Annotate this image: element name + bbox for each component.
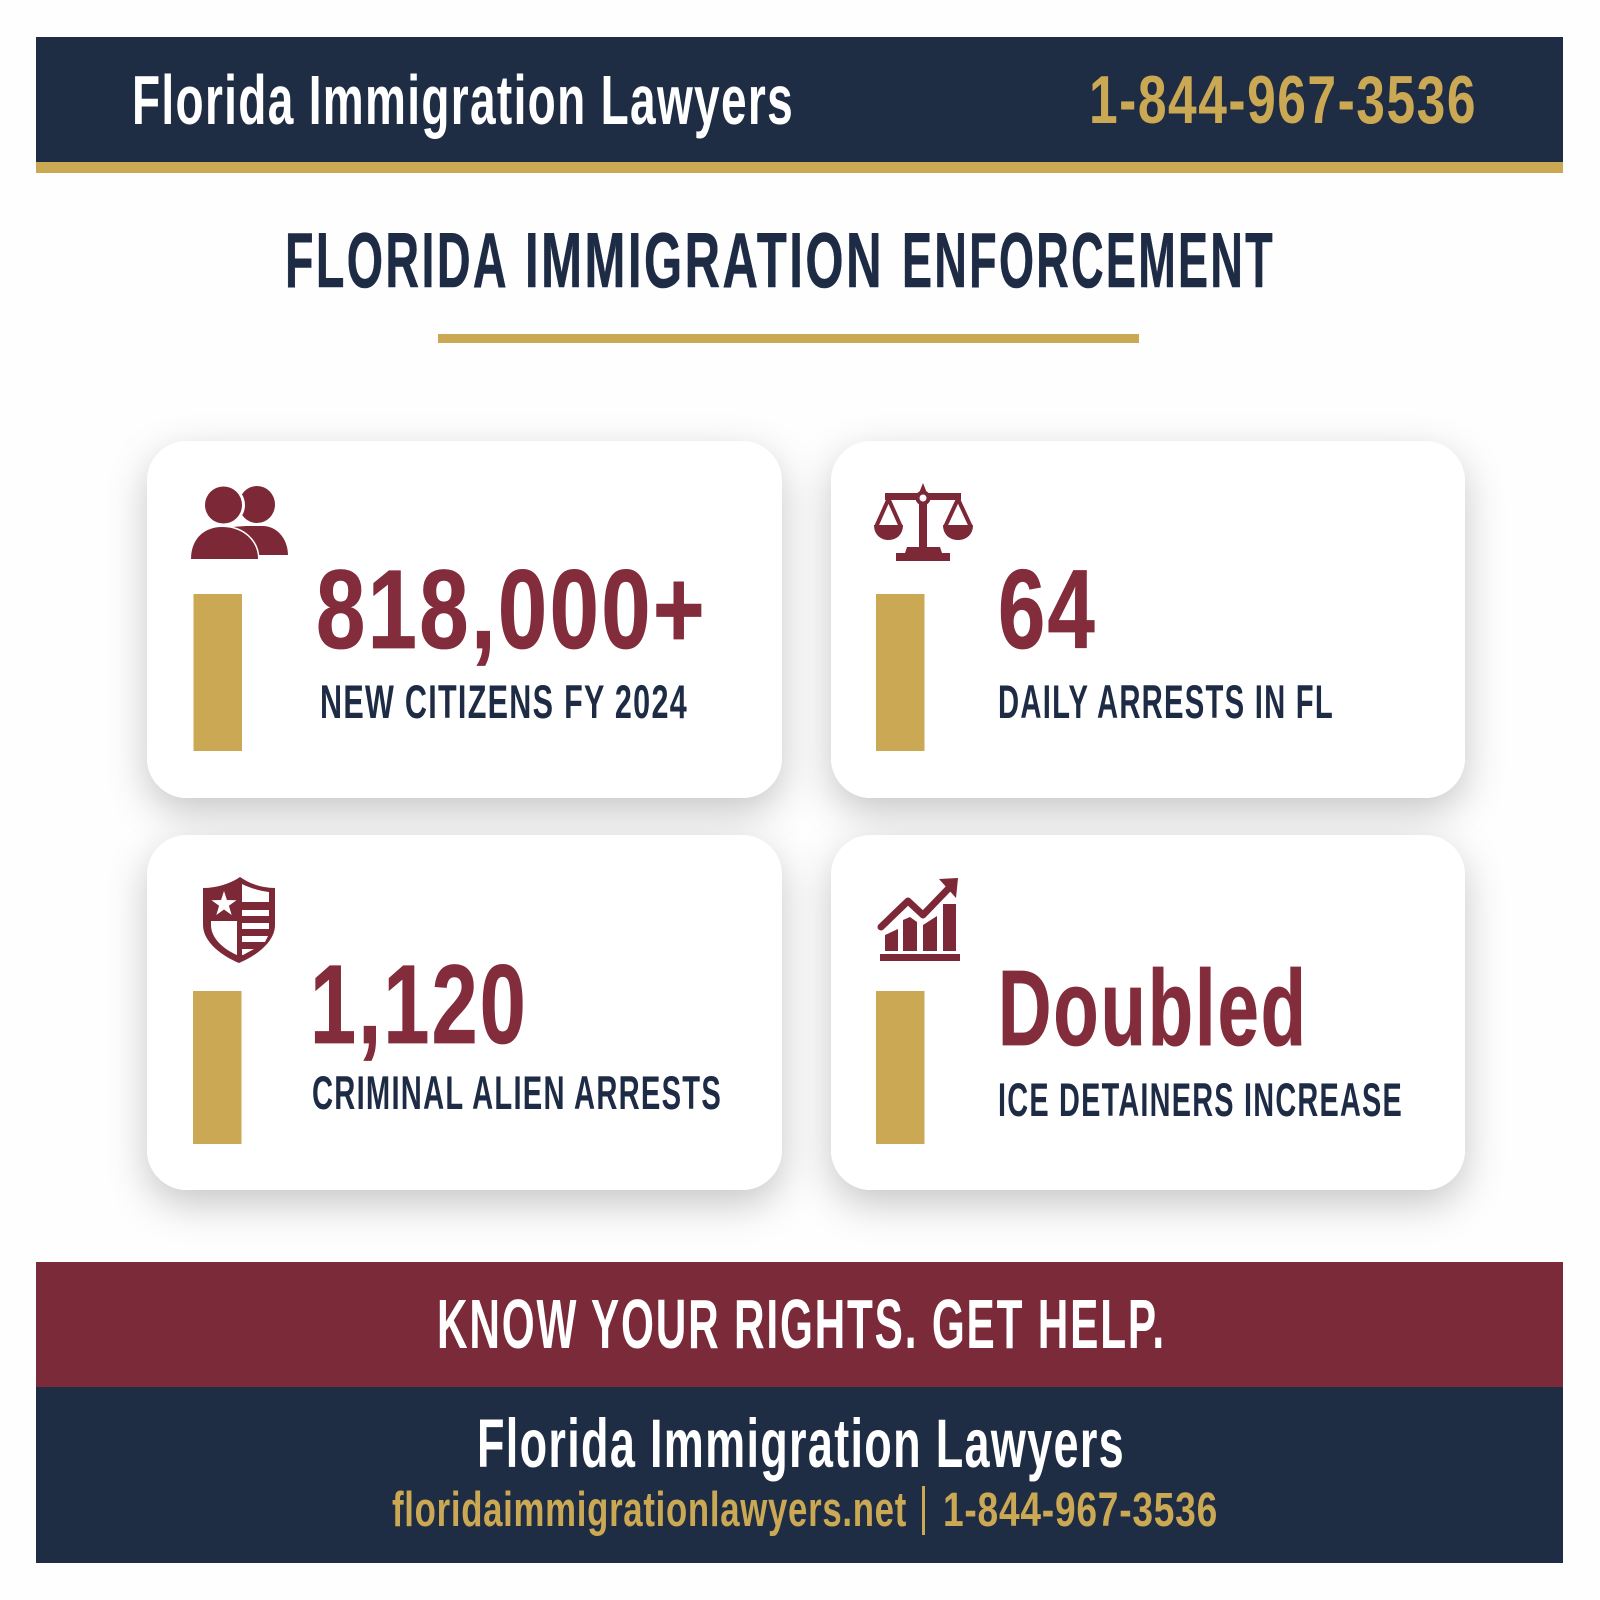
title: ENFORCEMENT [902, 216, 1275, 304]
stat label: CRIMINAL ALIEN ARRESTS [312, 1066, 722, 1119]
title [285, 216, 1275, 304]
stat value: 818,000+ [316, 547, 707, 672]
footer [36, 1387, 1563, 1563]
stat label: NEW CITIZENS FY 2024 [320, 675, 688, 728]
accent bar [194, 594, 242, 751]
footer phone number: 1-844-967-3536 [943, 1484, 1218, 1537]
icon: people [191, 484, 288, 559]
header phone number: 1-844-967-3536 [1089, 62, 1477, 138]
stat value: 1,120 [310, 942, 528, 1067]
stat value: Doubled [998, 947, 1308, 1068]
header firm name: Florida Immigration Lawyers [132, 61, 794, 139]
call to action banner [36, 1262, 1563, 1387]
panel: ice detainers [831, 835, 1465, 1190]
icon: shield [203, 877, 275, 963]
title: IMMIGRATION [525, 216, 884, 304]
accent bar [193, 991, 242, 1144]
footer website: floridaimmigrationlawyers.net [392, 1483, 907, 1537]
accent bar [876, 991, 924, 1144]
accent bar [876, 594, 924, 751]
title underline [438, 334, 1139, 343]
stat value: 64 [998, 547, 1097, 672]
panel: daily arrests [831, 441, 1465, 798]
icon: rising chart [880, 878, 960, 961]
panel: new citizens [147, 441, 782, 798]
footer separator [922, 1486, 925, 1535]
footer firm name: Florida Immigration Lawyers [477, 1405, 1125, 1482]
title: FLORIDA [285, 216, 509, 304]
header bar [36, 37, 1563, 173]
stat label: DAILY ARRESTS IN FL [998, 675, 1334, 728]
icon: scales of justice [874, 483, 973, 561]
panel: criminal alien arrests [147, 835, 782, 1190]
